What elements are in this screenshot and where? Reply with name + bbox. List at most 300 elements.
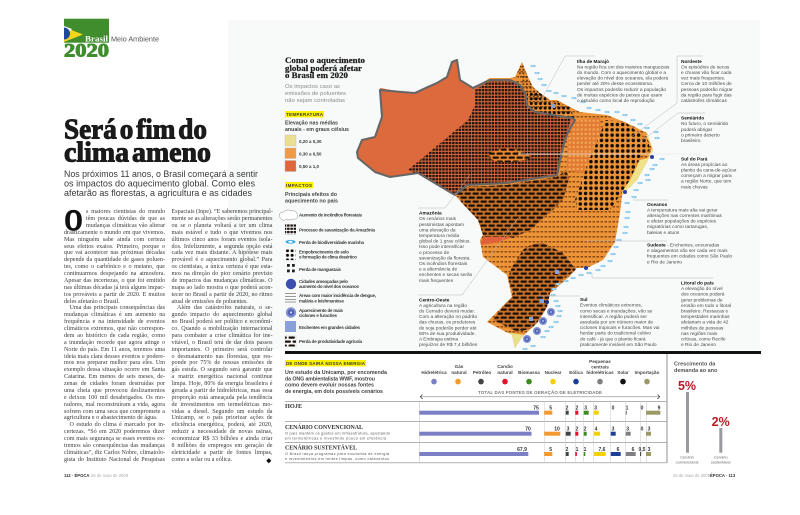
callout: Ilha de Marajó: Na região fica um dos maiores manguezais <box>577 64 670 70</box>
article text: column 2: de investimentos em termelétricas mo- <box>172 402 272 408</box>
article text: column 1: zenas de cidades foram destruídas por <box>64 381 165 387</box>
article text: column 1: que vai acontecer nas próximas décadas <box>64 250 165 256</box>
article text: column 1: continuarmos despejando na atmosfera. <box>64 271 165 277</box>
row: Cenário convencional: 2 <box>576 426 579 432</box>
legend: temperature: 0,50 a 1,0 <box>299 164 320 169</box>
legend heading: global poderá afetar <box>285 64 362 73</box>
row: Cenário sustentável: e investimentos em fontes limpas, como cataventos <box>285 457 389 461</box>
article text: column 2: gás estufa. O segundo será garantir que <box>172 367 272 373</box>
article text: column 2: 8 milhões de empregos em geração de <box>172 443 272 449</box>
row: Cenário sustentável: 6 <box>632 447 635 453</box>
callout: Amazônia: Os incêndios florestais <box>419 261 468 267</box>
energy source legend: Carvão <box>497 364 513 369</box>
callout: Nordeste: vez mais frequentes. <box>681 76 725 82</box>
row: Hoje: 3 <box>584 406 587 412</box>
demand growth chart: 5% <box>678 379 696 393</box>
icon: forest fire outline <box>279 210 298 220</box>
callout: Amazônia: uma elevação da <box>419 227 456 233</box>
main title: clima ameno <box>64 138 211 169</box>
callout: Sul do Pará: a região Norte, que tem <box>681 179 731 185</box>
region: red strip <box>480 237 513 245</box>
energy intro: Um estudo da Unicamp, por encomenda <box>285 370 387 376</box>
article text: column 2: mos na direção do pior cenário previsto <box>172 271 272 277</box>
icon: mangroves <box>287 264 295 272</box>
article text: column 2: mapa ao lado mostra o que poderá acon- <box>172 285 272 291</box>
article text: column 1: Mas ninguém sabe ainda com certeza <box>64 237 165 243</box>
callout: Centro-Oeste: do Cerrado deverá mudar. <box>419 308 475 314</box>
article text: column 1: Apesar das incertezas, o que foi emitido <box>64 278 165 284</box>
callout: Sudeste: e alagamentos vão ser cada vez mais <box>647 248 728 254</box>
section label: Meio Ambiente <box>111 36 159 43</box>
article text: column 1: e deixou 100 mil desabrigados. Os mo- <box>64 395 165 401</box>
article text: column 2: Além das catástrofes naturais, o se- <box>177 305 272 311</box>
row: Cenário convencional: CENÁRIO CONVENCIONAL <box>285 423 363 431</box>
region: south productivity loss <box>493 243 576 332</box>
energy source legend: Importação <box>635 370 660 375</box>
icon: savannization grid <box>285 224 296 234</box>
legend: impacts: Aumento de incêndios florestais <box>299 213 362 218</box>
article text: column 1: seus efeitos exatos. Primeiro, porque o <box>64 244 165 250</box>
fish markers: oceans <box>522 65 665 350</box>
callout: Nordeste: Os episódios de secas <box>681 64 730 70</box>
row: Cenário sustentável: CENÁRIO SUSTENTÁVEL <box>285 444 357 452</box>
callout: Centro-Oeste: A agricultura na região <box>419 303 467 309</box>
callout: Sul: do café - já que o plantio ficará <box>580 336 646 342</box>
legend: impacts: aquecimento no país <box>285 198 338 204</box>
callout: Centro-Oeste: A Embrapa estima <box>419 336 459 342</box>
legend: impacts: e formação de clima desértico <box>299 254 357 259</box>
callout: Ilha de Marajó: do mundo. Com o aquecimento global e a <box>577 70 666 76</box>
subtitle: os impactos do aquecimento global. Como eles <box>64 178 255 188</box>
callout: Amazônia: savanização da floresta. <box>419 255 471 261</box>
row: Cenário convencional: 3 <box>648 426 651 432</box>
energy source legend: natural <box>497 370 513 375</box>
footer left: 112 · ÉPOCA <box>64 473 89 478</box>
row: Cenário sustentável: 3 <box>648 447 651 453</box>
callout: Amazônia: mais frequentes <box>419 278 454 284</box>
callout: Sul: Sul <box>580 297 587 303</box>
callout: Litoral do país: erosão em todo o litoral <box>681 303 731 309</box>
article text: column 1: mudanças climáticas é um aumento na <box>64 312 165 318</box>
article text: column 1: Catarina. Em menos de seis meses, de- <box>64 374 165 380</box>
legend: impacts: Aparecimento de mais <box>299 308 343 313</box>
callout: Litoral do país: e Rio de Janeiro <box>681 342 716 348</box>
energy source legend: centrais <box>591 364 609 370</box>
article text: column 2: provável é o aquecimento global.” Para <box>172 257 272 263</box>
article text: column 1: mudanças climáticas vão alterar <box>86 223 165 229</box>
callout: Litoral do país: nas regiões mais <box>681 331 718 337</box>
row: Cenário convencional: 0 <box>641 426 644 432</box>
callout: Centro-Oeste: de soja poderão perder até <box>419 325 477 331</box>
callout: Centro-Oeste: prejuízos de R$ 7,4 bilhões <box>419 342 478 348</box>
callout: Oceanos: A temperatura mais alta vai gerar <box>647 207 718 213</box>
article text: column 1: com mais segurança se esses eventos ex- <box>64 436 165 442</box>
callout: Litoral do país: gerar problemas de <box>681 297 723 303</box>
legend: impacts: Perda de biodiversidade marinha <box>299 240 364 245</box>
callout: Amazônia: o processo de <box>419 250 449 256</box>
article text: column 1: sofrem com uma seca que compromete a <box>64 409 165 415</box>
row: Cenário sustentável: 1 <box>584 447 587 453</box>
row: Cenário convencional: 70 <box>525 426 531 432</box>
region: Amapá <box>518 65 550 100</box>
region: Amazon <box>357 60 575 195</box>
legend heading <box>285 56 365 80</box>
article text: column 2: vitável, o Brasil terá de dar dois passos <box>172 340 272 346</box>
row: Cenário convencional <box>285 423 651 440</box>
callout: Sudeste: Sudeste <box>647 242 666 248</box>
demand growth chart: demanda ao ano <box>674 368 718 374</box>
row: Hoje: 75 <box>533 406 539 412</box>
callout: Amazônia: Amazônia <box>419 211 442 217</box>
callout: Oceanos: e afetar populações de espécies <box>647 219 717 225</box>
callout: Ilha de Marajó: de muitas espécies de peixes que usam <box>577 92 662 98</box>
row: Cenário sustentável: 2 <box>566 447 569 453</box>
callout: Sul: herdar parte do tradicional cultivo <box>580 331 651 337</box>
article text: column 1: tos prováveis a partir de 2020. E muitos <box>64 292 165 298</box>
energy source legend: Biomassa <box>518 370 540 375</box>
region: central Amazon lens <box>489 148 531 162</box>
footer right: ÉPOCA · 113 <box>710 473 736 478</box>
icon: desertification dots <box>285 250 296 260</box>
article text: column 1: climáticos extremos, que não correspon- <box>64 326 165 332</box>
logo: Brasil 2020: 2020 <box>64 42 109 62</box>
footer left <box>64 473 129 478</box>
callout: Semiárido: brasileiro <box>681 138 701 144</box>
callout: Litoral do país: milhões de pessoas <box>681 325 724 331</box>
footer right: 25 de maio de 2009 <box>673 473 711 478</box>
article text: column 2: a matriz energética nacional continue <box>172 374 272 380</box>
region: north-east desertification <box>575 120 650 210</box>
row: Cenário sustentável: 5 <box>549 447 552 453</box>
energy source legend: Petróleo <box>473 370 491 375</box>
row: Cenário convencional: em termelétricas e investindo pouco em eficiência <box>285 436 387 440</box>
row: Cenário convencional: 10 <box>554 426 560 432</box>
demand growth chart: Crescimento da <box>674 362 716 368</box>
Amazon border road line <box>357 60 575 195</box>
energy source legend: Nuclear <box>545 370 562 375</box>
icon: disease areas <box>285 293 296 302</box>
row: Hoje: 3 <box>594 406 597 412</box>
energy intro: da ONG ambientalista WWF, mostrou <box>285 376 375 382</box>
demand growth chart: convencional <box>676 460 698 464</box>
article text: column 2: eficiência energética, poderá, até 2020, <box>172 422 272 428</box>
article text: column 2: ponde por 75% de nossas emissões de <box>172 360 272 366</box>
demand growth chart: Cenário <box>680 454 694 460</box>
article text: column 2: limpa. Hoje, 80% da energia brasileira é <box>172 381 272 387</box>
row: Cenário convencional: 2 <box>584 426 587 432</box>
callout: Sul do Pará: Sul do Pará <box>681 156 708 162</box>
callout: Oceanos: Oceanos <box>647 202 668 208</box>
icon: floods <box>285 321 296 332</box>
callout: Sul: praticamente inviável em São Paulo <box>580 342 657 348</box>
article text: column 1: frequência e na intensidade de eventos <box>64 319 165 325</box>
article text: column 1: s maiores cientistas do mundo <box>86 209 165 215</box>
article text: column 2: para combater a crise climática for ine- <box>172 333 272 339</box>
article text: column 1: mos nos preparar melhor para eles. Um <box>64 360 165 366</box>
callout: Semiárido: poderá abrigar <box>681 127 713 133</box>
row: Cenário sustentável: 0,5 <box>639 447 646 453</box>
article text: column 1: ideia mais clara desses eventos e podere- <box>64 354 165 360</box>
callout: Ilha de Marajó: elevação do nível dos oceanos, ela poderá <box>577 76 669 82</box>
article text: column 2: co. Quando a mobilização internacional <box>172 326 272 332</box>
article text: column 1: dem ao histórico de cada região, como <box>64 333 165 339</box>
article text: column 1: agricultura e o abastecimento de água. <box>64 415 157 421</box>
article text: column 2: dos. Infelizmente, a segunda opção está <box>172 244 272 250</box>
row: Hoje: 5 <box>549 406 552 412</box>
article text: column 1: uma cheia que provocou deslizamentos <box>64 388 165 394</box>
callout: Litoral do país: brasileiro. Ressacas e <box>681 308 729 314</box>
legend subtitle: emissões de poluentes <box>285 91 346 97</box>
row: Cenário convencional: 4 <box>595 426 598 432</box>
article text: column 1: drasticamente o mundo em que vivemos. <box>64 230 165 236</box>
article text: column 2: vidas a diesel. Segundo um estudo da <box>172 409 272 415</box>
energy intro: de energia, em dois possíveis cenários <box>285 389 383 395</box>
demand growth chart: Cenário <box>714 454 728 460</box>
article text: column 2: reduzir a necessidade de novas usinas, <box>172 429 272 435</box>
callout: Semiárido: Semiárido <box>681 116 704 122</box>
legend: impacts: ciclones e furacões <box>299 313 337 318</box>
energy source legend <box>421 359 660 384</box>
region: Amazon savannization <box>408 81 571 194</box>
article text: column 2: ou se o planeta voltará a ter um clima <box>172 223 272 229</box>
article text: column 2: economizar R$ 33 bilhões e ainda criar <box>172 436 272 442</box>
callout: Sudeste: frequentes em cidades como São Paulo <box>647 254 732 260</box>
callout: Ilha de Marajó: perder até 20% desse ecossistema. <box>577 81 653 87</box>
legend: temperature: Elevação nas médias <box>285 120 338 126</box>
callout: Sul do Pará: plantio da cana-de-açúcar <box>681 168 737 174</box>
callout: Litoral do país: críticas, como Recife <box>681 336 726 342</box>
article text: column 2: importantes. O primeiro será controlar <box>172 347 272 353</box>
row: Cenário sustentável: 1 <box>576 447 579 453</box>
callout: Nordeste: Cerca de 10 milhões de <box>681 81 732 87</box>
row: Cenário sustentável: 6 <box>617 447 620 453</box>
legend: impacts: Processo de savanização da Amazônia <box>299 228 375 232</box>
callout: Sudeste: - Enchentes, enxurradas <box>666 242 720 248</box>
callout: Nordeste: pessoas poderão migrar <box>681 87 733 93</box>
row: Cenário convencional: 3 <box>612 426 615 432</box>
article text: column 1: radores, mal reconstruíram a vida, agora <box>64 402 165 408</box>
row: Hoje: 0 <box>612 406 615 412</box>
energy source legend: hidrelétricas <box>586 370 614 375</box>
legend: impacts: Perda de produtividade agrícola <box>299 339 362 344</box>
callout: Nordeste: e chuvas vão ficar cada <box>681 70 732 76</box>
row: Hoje: 9 <box>658 406 661 412</box>
legend: impacts: Enchentes em grandes cidades <box>299 325 360 330</box>
table grid <box>285 401 667 463</box>
article text: column 2: proporção está ameaçada pela tendência <box>172 395 272 401</box>
article text: column 1: Norte do país. Em 11 anos, teremos uma <box>64 347 165 353</box>
article text: column 2: Unicamp, se o país priorizar ações de <box>172 415 272 421</box>
logo: Brasil 2020 <box>64 19 109 62</box>
legend: temperature: anuais - em graus célsius <box>285 127 349 133</box>
callout: Nordeste: catástrofes climáticas <box>681 98 727 104</box>
demand growth chart: sustentável <box>711 460 731 464</box>
callout: Centro-Oeste: das chuvas, os produtores <box>419 320 476 326</box>
article text: column 1: a inundação recorde que agora atinge o <box>64 340 165 346</box>
legend: temperature: 0,20 a 0,30 <box>299 139 322 144</box>
article text: column 2: como a solar ou a eólica. <box>172 457 232 463</box>
subtitle: afetarão as florestas, a agricultura e as cidades <box>64 188 252 198</box>
callout: Sul do Pará: começam a migrar para <box>681 173 732 179</box>
icon: threatened cities <box>286 279 296 289</box>
callout: Litoral do país: Litoral do país <box>681 280 714 286</box>
legend heading: Como o aquecimento <box>285 56 365 65</box>
row: Cenário convencional: O país mantém os gastos em infraestrutura, apostando <box>285 432 390 436</box>
article text: column 2: gundo impacto do aquecimento global <box>172 312 272 318</box>
energy source legend: Solar <box>617 370 629 375</box>
region: eastern orange base <box>380 62 653 348</box>
legend subtitle <box>285 84 346 104</box>
cyclones and threatened cities <box>523 104 654 343</box>
callout: Amazônia: e a alternância de <box>419 267 457 273</box>
callout: Litoral do país: tempestades marinhas <box>681 314 730 320</box>
row: Hoje: HOJE <box>285 403 302 410</box>
article text: column 2: no Brasil poderá ser político e econômi- <box>172 319 272 325</box>
row: Hoje: 2 <box>576 406 579 412</box>
callout: Oceanos: migratórias como tartarugas, <box>647 224 708 230</box>
row: Cenário convencional: 3 <box>626 426 629 432</box>
callout: Amazônia: Isso pode intensificar <box>419 244 464 250</box>
callout: Sul: ciclones tropicais e furacões. Mas vai <box>580 325 659 331</box>
main title <box>64 114 211 169</box>
article end mark <box>266 458 271 463</box>
legend subtitle: não sejam controladas <box>285 98 345 104</box>
callout: Centro-Oeste: Com a alteração no padrão <box>419 314 477 320</box>
row: Hoje: 0 <box>641 406 644 412</box>
callout: Sul do Pará: mais chuvas <box>681 184 708 190</box>
energy intro <box>285 370 387 395</box>
article text: column 2: eletricidade a partir de fontes limpas, <box>172 450 272 456</box>
callout: Sul: Eventos climáticos extremos, <box>580 303 642 309</box>
callout: Amazônia: temperatura média <box>419 233 460 239</box>
row: Cenário sustentável: O Brasil lança programas para economia de energia <box>285 452 390 456</box>
logo: Brasil 2020: Brasil <box>85 35 109 44</box>
demand growth chart: 2% <box>712 415 730 429</box>
article text: column 1 <box>64 208 165 463</box>
callout: Amazônia: pessimistas apontam <box>419 222 464 228</box>
article text: column 1: tremos são consequências das mudanças <box>64 443 165 449</box>
article text: column 1: tes, como o carbônico e o metano, que <box>64 264 165 270</box>
callout: Nordeste: da região para fugir das <box>681 92 732 98</box>
callout: Sul: assolada por um número maior de <box>580 320 653 326</box>
callout: Litoral do país: afetariam a vida de 42 <box>681 320 729 326</box>
energy intro: como devem evoluir nossas fontes <box>285 383 374 389</box>
article text: column 1: gista do Instituto Nacional de Pesquisas <box>64 457 165 463</box>
callout: Oceanos: baleias e atuns <box>647 230 680 236</box>
article text: column 1: exemplo dessa situação ocorre em Santa <box>64 367 165 373</box>
energy source legend: Hidrelétrica <box>421 370 447 375</box>
legend: impacts: Perda de manguezais <box>299 267 341 272</box>
article text: column 2: gerada a partir de hidrelétricas, mas essa <box>172 388 272 394</box>
article text: column 2: tecer no Brasil a partir de 2020, no ritmo <box>172 292 272 298</box>
icon: cyclones <box>286 307 296 318</box>
callout: Sul: como secas e inundações, vão se <box>580 308 653 314</box>
total axis label with arrows <box>420 389 660 399</box>
energy source legend: natural <box>451 370 467 375</box>
article text: column 2: últimos cinco anos foram eventos isola- <box>172 237 272 243</box>
legend: impacts: IMPACTOS <box>286 183 312 188</box>
row: Cenário sustentável <box>285 444 651 461</box>
callout: Sul do Pará: As áreas propícias ao <box>681 162 728 168</box>
icon: agricultural productivity <box>285 336 296 346</box>
callout: Semiárido: No futuro, o semiárido <box>681 121 729 127</box>
energy source legend: Gás <box>455 364 464 369</box>
callout: Amazônia: global de 1 grau célsius. <box>419 239 471 245</box>
row: Hoje: 2 <box>566 406 569 412</box>
article text: column 2: o desmatamento nas florestas, que res- <box>172 354 272 360</box>
callout: Amazônia: Os cenários mais <box>419 216 457 222</box>
footer right <box>673 473 736 478</box>
main title: Será o fim do <box>64 114 207 146</box>
legend subtitle: Os impactos caso as <box>285 84 340 90</box>
callout: Ilha de Marajó: o estuário como local de reprodução <box>577 98 655 104</box>
legend: impacts <box>279 182 376 346</box>
article text: column 1: nas últimas décadas já terá alguns impac- <box>64 285 165 291</box>
region: yellow coast <box>622 134 653 194</box>
row: Hoje: 1 <box>626 406 629 412</box>
article text: column 1: deles afetarão o Brasil. <box>64 299 120 305</box>
article text: column 2: Espaciais (Inpe). “E saberemos principal- <box>172 209 273 215</box>
footer left: 25 de maio de 2009 <box>91 473 129 478</box>
legend: impacts: Áreas com maior incidência de dengue, <box>299 292 376 298</box>
article text: column 1: O estudo do clima é marcado por in- <box>70 422 165 428</box>
legend: impacts: Cidades ameaçadas pelo <box>299 279 348 284</box>
energy source legend: Pequenas <box>589 359 611 364</box>
article text: column 1: climáticas”, diz Carlos Nobre, climatolo- <box>64 450 165 456</box>
region: Mato Grosso productivity loss <box>457 170 569 238</box>
article text: column 2: cada vez mais distante. A hipótese mais <box>172 250 272 256</box>
section rule <box>285 351 761 354</box>
article text: column 1: Uma das principais consequências das <box>70 305 165 311</box>
article text: column 2: os cientistas, a única certeza é que esta- <box>172 264 272 270</box>
icon: marine biodiversity <box>286 240 296 244</box>
callout: Amazônia: enchentes e secas serão <box>419 272 473 278</box>
region: red north-east transition <box>566 117 602 172</box>
demand growth chart <box>674 362 731 464</box>
legend: impacts: malária e leishmaniose <box>299 298 344 304</box>
subtitle: Nos próximos 11 anos, o Brasil começará a sentir <box>64 169 258 179</box>
background panel behind map <box>228 20 760 350</box>
row: Cenário convencional: 3 <box>567 426 570 432</box>
total axis label with arrows: TOTAL DAS FONTES DE GERAÇÃO DE ELETRICIDADE <box>478 389 602 395</box>
legend heading: o Brasil em 2020 <box>285 71 348 80</box>
legend: impacts: Empobrecimento do solo <box>299 249 349 254</box>
callout: Litoral do país: A elevação do nível <box>681 286 723 292</box>
article text: column 2: mais estável e tudo o que vivemos nos <box>172 230 272 236</box>
drop cap: O <box>64 204 82 237</box>
legend: temperature: TEMPERATURA <box>286 112 324 117</box>
energy heading: DE ONDE SAIRÁ NOSSA ENERGIA <box>286 360 366 366</box>
callout: Sul: intensificar. A região poderá ser <box>580 314 647 320</box>
map of Brazil <box>350 55 660 355</box>
callout: Sudeste: e Rio de Janeiro <box>647 259 682 265</box>
legend: temperature: 0,30 a 0,50 <box>299 152 322 156</box>
article text: column 2: atual de emissões de poluentes. <box>172 299 248 305</box>
callout: Centro-Oeste: Centro-Oeste <box>419 297 450 303</box>
article text: column 2 <box>172 208 273 463</box>
callout: Ilha de Marajó: Ilha de Marajó <box>577 59 609 65</box>
callout: Ilha de Marajó: Os impactos poderão reduzir a população <box>577 87 666 93</box>
row: Hoje <box>285 403 661 415</box>
row: Cenário sustentável: 67,9 <box>517 447 527 453</box>
callout: Oceanos: alterações nas correntes marítimas <box>647 213 723 219</box>
legend: impacts: Principais efeitos do <box>285 192 338 198</box>
article text: column 2: de impactos das mudanças climáticas. O <box>172 278 272 284</box>
callout: Nordeste: Nordeste <box>681 59 702 65</box>
article text: column 2: mente se as alterações serão permanentes <box>172 216 272 222</box>
region: Marajó mangroves <box>527 92 574 118</box>
article text: column 1: depende da quantidade de gases poluen- <box>64 257 165 263</box>
